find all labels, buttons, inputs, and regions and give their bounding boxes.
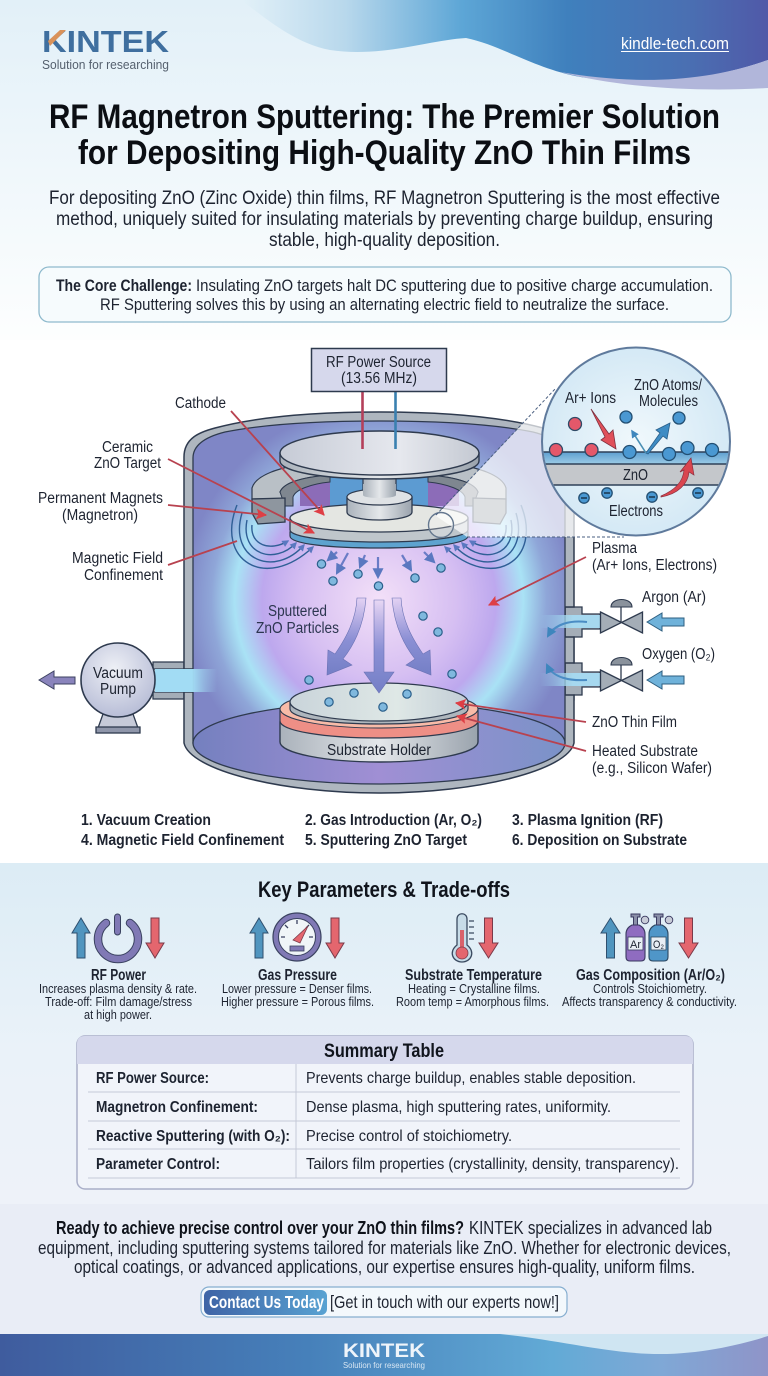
vacuum port tubes	[153, 662, 184, 699]
sputtered particle small arrows	[328, 552, 434, 577]
label: permanent magnets	[38, 490, 163, 524]
process steps	[81, 812, 687, 849]
logo: KINTEK: Solution for researching	[42, 58, 169, 72]
label: magnetic field confinement: Confinement	[84, 567, 164, 584]
label: magnetic field confinement	[72, 550, 164, 584]
row: reactive sputtering: Reactive Sputtering (with O₂):	[96, 1128, 290, 1145]
footer logo: KINTEK	[343, 1340, 425, 1362]
port glow: gas inlets	[540, 615, 600, 686]
logo: KINTEK: KINTEK	[42, 24, 170, 59]
contact button: Contact Us Today	[209, 1292, 324, 1312]
ZnO layer label: ZnO	[623, 467, 648, 484]
substrate holder stack	[280, 683, 478, 762]
parameter: substrate temperature: Room temp = Amorphous films.	[396, 994, 549, 1009]
table header: Summary Table	[324, 1041, 444, 1062]
parameter: gas pressure	[221, 967, 374, 1009]
magnified zone overlay	[428, 388, 640, 538]
CTA text	[38, 1218, 731, 1277]
Ar+ ions label: Ar+ Ions	[565, 390, 616, 407]
CTA text: KINTEK specializes in advanced lab	[469, 1218, 712, 1238]
label: heated substrate: (e.g., Silicon Wafer)	[592, 760, 712, 777]
callout: the core challenge: RF Sputtering solves this by using an alternating electric field to neutralize the surface.	[100, 295, 669, 314]
chamber shell	[184, 412, 574, 793]
title	[49, 98, 720, 172]
label: magnetic field confinement: Magnetic Field	[72, 550, 163, 567]
row: magnetron confinement: Magnetron Confinement:	[96, 1099, 258, 1116]
row: reactive sputtering	[96, 1128, 512, 1145]
process steps: 5. Sputtering ZnO Target	[305, 832, 468, 849]
chamber floor	[193, 702, 565, 784]
RF power source box: (13.56 MHz)	[341, 370, 417, 387]
row: RF power source: RF Power Source:	[96, 1070, 209, 1087]
parameter: RF power: at high power.	[84, 1007, 152, 1022]
process steps: 3. Plasma Ignition (RF)	[512, 812, 663, 829]
vacuum pump: Vacuum	[93, 665, 143, 682]
row: RF power source	[96, 1070, 636, 1087]
label: permanent magnets: Permanent Magnets	[38, 490, 163, 507]
electrons label: Electrons	[609, 503, 663, 520]
callout arrows	[168, 411, 586, 751]
target assembly	[280, 431, 479, 548]
parameter: gas pressure: Gas Pressure	[258, 967, 337, 984]
footer bar	[0, 1334, 768, 1376]
gas inflow curves	[547, 622, 587, 680]
ZnO particles	[305, 560, 456, 711]
parameter: gas composition	[562, 967, 737, 1009]
parameter: gas composition: Controls Stoichiometry.	[593, 981, 707, 996]
gas port tubes	[565, 607, 600, 700]
label: heated substrate: Heated Substrate	[592, 743, 698, 760]
contact button	[201, 1287, 567, 1317]
icon: gas pressure gauge	[250, 913, 344, 961]
row: RF power source: Prevents charge buildup, enables stable deposition.	[306, 1070, 636, 1087]
contact button: [Get in touch with our experts now!]	[330, 1292, 559, 1312]
atoms	[620, 411, 718, 460]
ZnO atoms label: Molecules	[639, 393, 698, 410]
process steps: 2. Gas Introduction (Ar, O₂)	[305, 812, 482, 829]
parameter: substrate temperature: Substrate Temperature	[405, 967, 542, 984]
row: magnetron confinement	[96, 1099, 611, 1116]
parameter: RF power: RF Power	[91, 967, 146, 984]
label: ceramic ZnO target	[94, 439, 162, 472]
inset: target surface magnified	[540, 348, 735, 536]
arrow: exhaust	[39, 671, 75, 689]
footer logo	[343, 1340, 425, 1370]
row: magnetron confinement: Dense plasma, high sputtering rates, uniformity.	[306, 1099, 611, 1116]
parameter: substrate temperature	[396, 967, 549, 1009]
ions	[550, 418, 598, 456]
parameter: gas composition: Gas Composition (Ar/O₂)	[576, 967, 725, 984]
intro paragraph: stable, high-quality deposition.	[269, 229, 500, 251]
magnetic field lines	[232, 505, 526, 568]
RF power wires	[362, 391, 396, 449]
label: argon: Argon (Ar)	[642, 589, 706, 606]
panel: call to action	[0, 1204, 768, 1334]
intro paragraph	[49, 187, 720, 251]
process steps: 1. Vacuum Creation	[81, 812, 211, 829]
arrow: argon inlet	[647, 613, 684, 631]
parameter: substrate temperature: Heating = Crystalline films.	[408, 981, 540, 996]
label: plasma	[592, 540, 717, 574]
process steps: 6. Deposition on Substrate	[512, 832, 687, 849]
electron path arrow	[661, 458, 694, 497]
central column	[363, 478, 396, 500]
parameter: RF power	[39, 967, 197, 1022]
row: parameter control: Tailors film properties (crystallinity, density, transparency).	[306, 1156, 679, 1173]
label: sputtered ZnO particles	[256, 603, 339, 637]
electrons	[579, 488, 703, 503]
parameter: RF power: Increases plasma density & rate.	[39, 981, 197, 996]
big deposition arrows	[327, 598, 431, 693]
label: oxygen: Oxygen (O₂)	[642, 646, 715, 663]
header wave	[240, 0, 768, 89]
callout: the core challenge	[39, 267, 731, 322]
callout: the core challenge: The Core Challenge:	[56, 276, 192, 295]
row: parameter control	[96, 1156, 679, 1173]
process steps: 4. Magnetic Field Confinement	[81, 832, 285, 849]
title: for Depositing High-Quality ZnO Thin Films	[78, 134, 691, 172]
parameter: gas pressure: Higher pressure = Porous films.	[221, 994, 374, 1009]
page background	[0, 0, 768, 340]
port glow: vacuum	[155, 669, 217, 692]
summary table	[77, 1036, 693, 1189]
ZnO atoms label	[634, 377, 703, 410]
label: ZnO thin film: ZnO Thin Film	[592, 714, 677, 731]
valve: oxygen	[600, 658, 642, 691]
parameter: gas composition: Affects transparency & conductivity.	[562, 994, 737, 1009]
ejected atom arrows	[632, 423, 670, 454]
table header	[77, 1036, 693, 1064]
icon: gas cylinders: Ar	[630, 939, 641, 951]
ZnO atoms label: ZnO Atoms/	[634, 377, 703, 394]
row: reactive sputtering: Precise control of stoichiometry.	[306, 1128, 512, 1145]
row: parameter control: Parameter Control:	[96, 1156, 220, 1173]
logo: KINTEK	[42, 24, 170, 72]
label: sputtered ZnO particles: ZnO Particles	[256, 620, 339, 637]
vacuum pump: Pump	[100, 681, 136, 698]
icon: gas cylinders	[601, 914, 698, 961]
CTA text: Ready to achieve precise control over your ZnO thin films?	[56, 1218, 464, 1238]
substrate holder stack: Substrate Holder	[327, 742, 431, 759]
parameter: gas pressure: Lower pressure = Denser films.	[222, 981, 372, 996]
RF power source box	[312, 348, 446, 392]
label: cathode: Cathode	[175, 395, 226, 412]
panel: key parameters	[0, 863, 768, 1204]
icon: RF power	[72, 914, 164, 959]
magnet ring back panels	[252, 462, 506, 506]
label: ceramic ZnO target: ZnO Target	[94, 455, 162, 472]
diagram: sputtering chamber	[38, 348, 735, 793]
website link: kindle-tech.com	[621, 34, 729, 53]
icon: gas cylinders: O₂	[653, 939, 664, 951]
label: sputtered ZnO particles: Sputtered	[268, 603, 327, 620]
label: permanent magnets: (Magnetron)	[62, 507, 138, 524]
label: heated substrate	[592, 743, 712, 777]
cathode top plate	[280, 453, 479, 479]
RF power source box: RF Power Source	[326, 354, 431, 371]
valve: argon	[600, 600, 642, 633]
label: plasma: (Ar+ Ions, Electrons)	[592, 557, 717, 574]
parameter: RF power: Trade-off: Film damage/stress	[45, 994, 192, 1009]
vacuum pump	[81, 643, 155, 733]
label: plasma: Plasma	[592, 540, 637, 557]
icon: substrate temperature	[452, 914, 498, 962]
label: ceramic ZnO target: Ceramic	[102, 439, 153, 456]
permanent magnets	[252, 498, 506, 524]
footer logo: Solution for researching	[343, 1360, 425, 1370]
callout: the core challenge: Insulating ZnO targets halt DC sputtering due to positive charge accumulation.	[196, 276, 713, 295]
plasma interior	[193, 421, 565, 743]
arrow: oxygen inlet	[647, 671, 684, 689]
heading: key parameters: Key Parameters & Trade-offs	[258, 877, 510, 902]
Ar+ ion impact arrow	[591, 409, 616, 449]
